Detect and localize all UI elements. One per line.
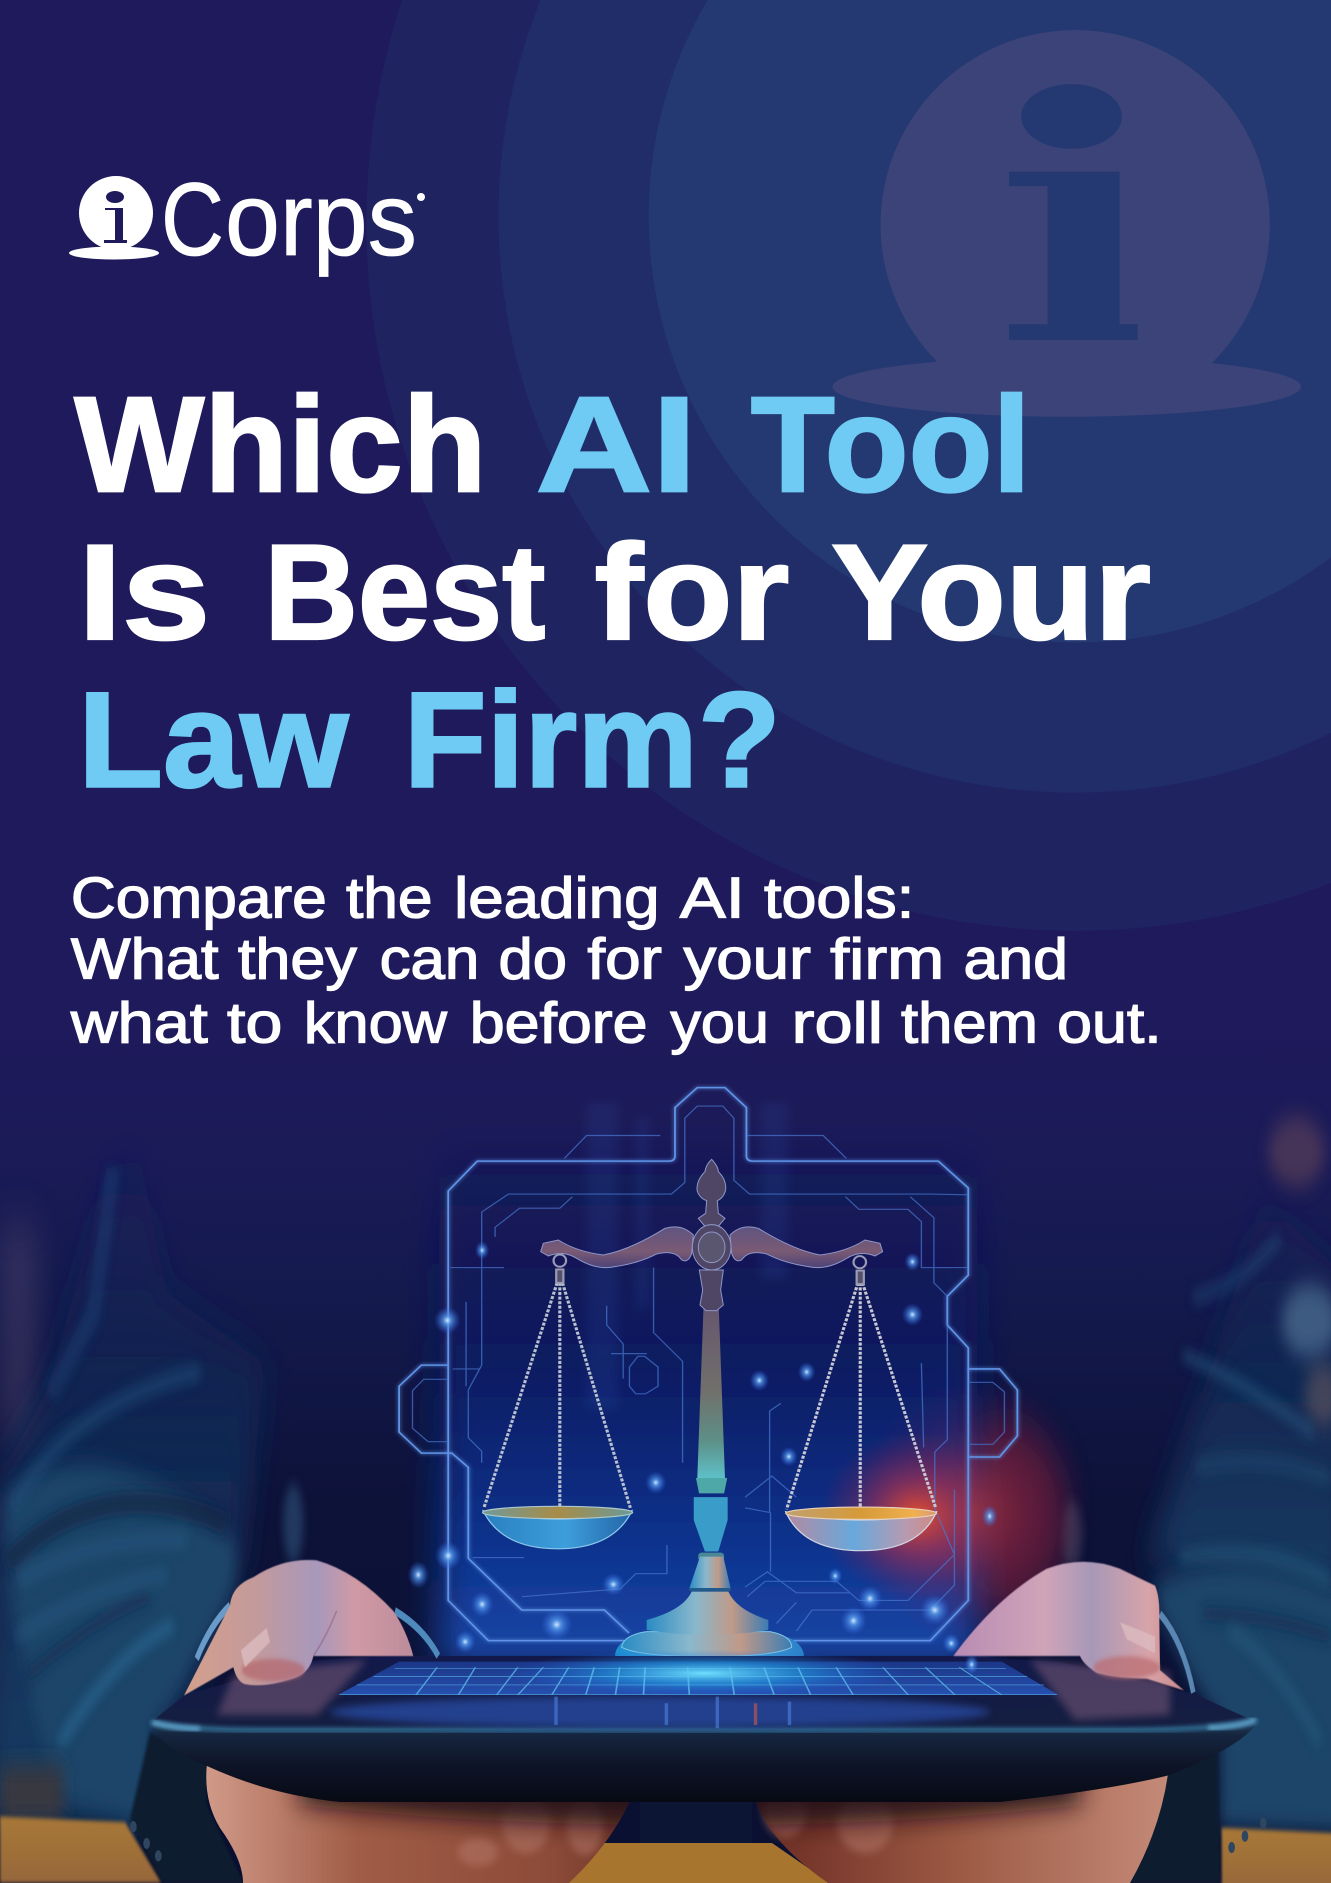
subtitle: know (304, 991, 447, 1055)
subtitle: for (587, 928, 662, 992)
subtitle: they (238, 928, 357, 992)
title: Firm? (404, 664, 781, 816)
subtitle: do (499, 928, 567, 992)
subtitle: can (380, 928, 479, 992)
subtitle: your (684, 928, 811, 992)
subtitle: what (70, 991, 208, 1055)
title: Tool (751, 368, 1031, 520)
right arm and suit sleeve (940, 1117, 1331, 1883)
thumb reflections (217, 1660, 367, 1715)
right chains (787, 1283, 936, 1518)
left arm and suit sleeve (0, 1158, 303, 1883)
right pan (786, 1507, 937, 1551)
logo (69, 162, 425, 278)
subtitle: What (71, 928, 219, 992)
subtitle: AI (680, 866, 745, 930)
right hand under tablet (756, 1776, 1168, 1883)
subtitle: Compare (71, 866, 327, 930)
scales: base (615, 1557, 804, 1675)
screen light streaks (556, 1697, 789, 1728)
logo wordmark: orps (225, 162, 417, 278)
logo icon (69, 176, 159, 260)
front edge highlight (152, 1720, 1256, 1730)
tablet (150, 1650, 1258, 1802)
hologram circuit panel (399, 1072, 1091, 1666)
left hand under tablet (206, 1766, 630, 1883)
stars in hologram (408, 1241, 998, 1653)
title: for (595, 516, 789, 668)
title: Best (264, 516, 545, 668)
subtitle: them (901, 991, 1038, 1055)
beam (541, 1227, 883, 1268)
subtitle (70, 866, 1162, 1055)
title: Is (78, 516, 210, 668)
scales: beam and finial (541, 1159, 883, 1311)
title: Law (78, 664, 349, 816)
logo wordmark: C (161, 162, 224, 278)
subtitle: to (227, 991, 282, 1055)
decorative concentric circles with large i mark (366, 0, 1331, 931)
subtitle: out. (1057, 991, 1162, 1055)
finial and pivot (692, 1159, 731, 1311)
scales: chains, pans and column (483, 1255, 937, 1561)
left chains (484, 1283, 630, 1518)
title: Which (74, 368, 487, 520)
left thumb on tablet (184, 1560, 438, 1695)
subtitle: firm (830, 928, 944, 992)
title: AI (536, 368, 697, 520)
left pan (483, 1506, 633, 1549)
subtitle: before (470, 991, 648, 1055)
title (74, 368, 1151, 816)
subtitle: roll (792, 991, 883, 1055)
screen grid (340, 1667, 1057, 1695)
right thumb on tablet (953, 1562, 1193, 1693)
chain hooks (554, 1255, 866, 1284)
subtitle: tools: (764, 866, 914, 930)
subtitle: leading (454, 866, 660, 930)
glowing screen (338, 1650, 1059, 1728)
subtitle: and (963, 928, 1068, 992)
gap between lower hands (640, 1770, 752, 1843)
subtitle: you (670, 991, 769, 1055)
table centre (540, 1843, 830, 1883)
column (694, 1306, 728, 1561)
dark photo backdrop (0, 1030, 1331, 1883)
title: Your (831, 516, 1151, 668)
subtitle: the (346, 866, 432, 930)
